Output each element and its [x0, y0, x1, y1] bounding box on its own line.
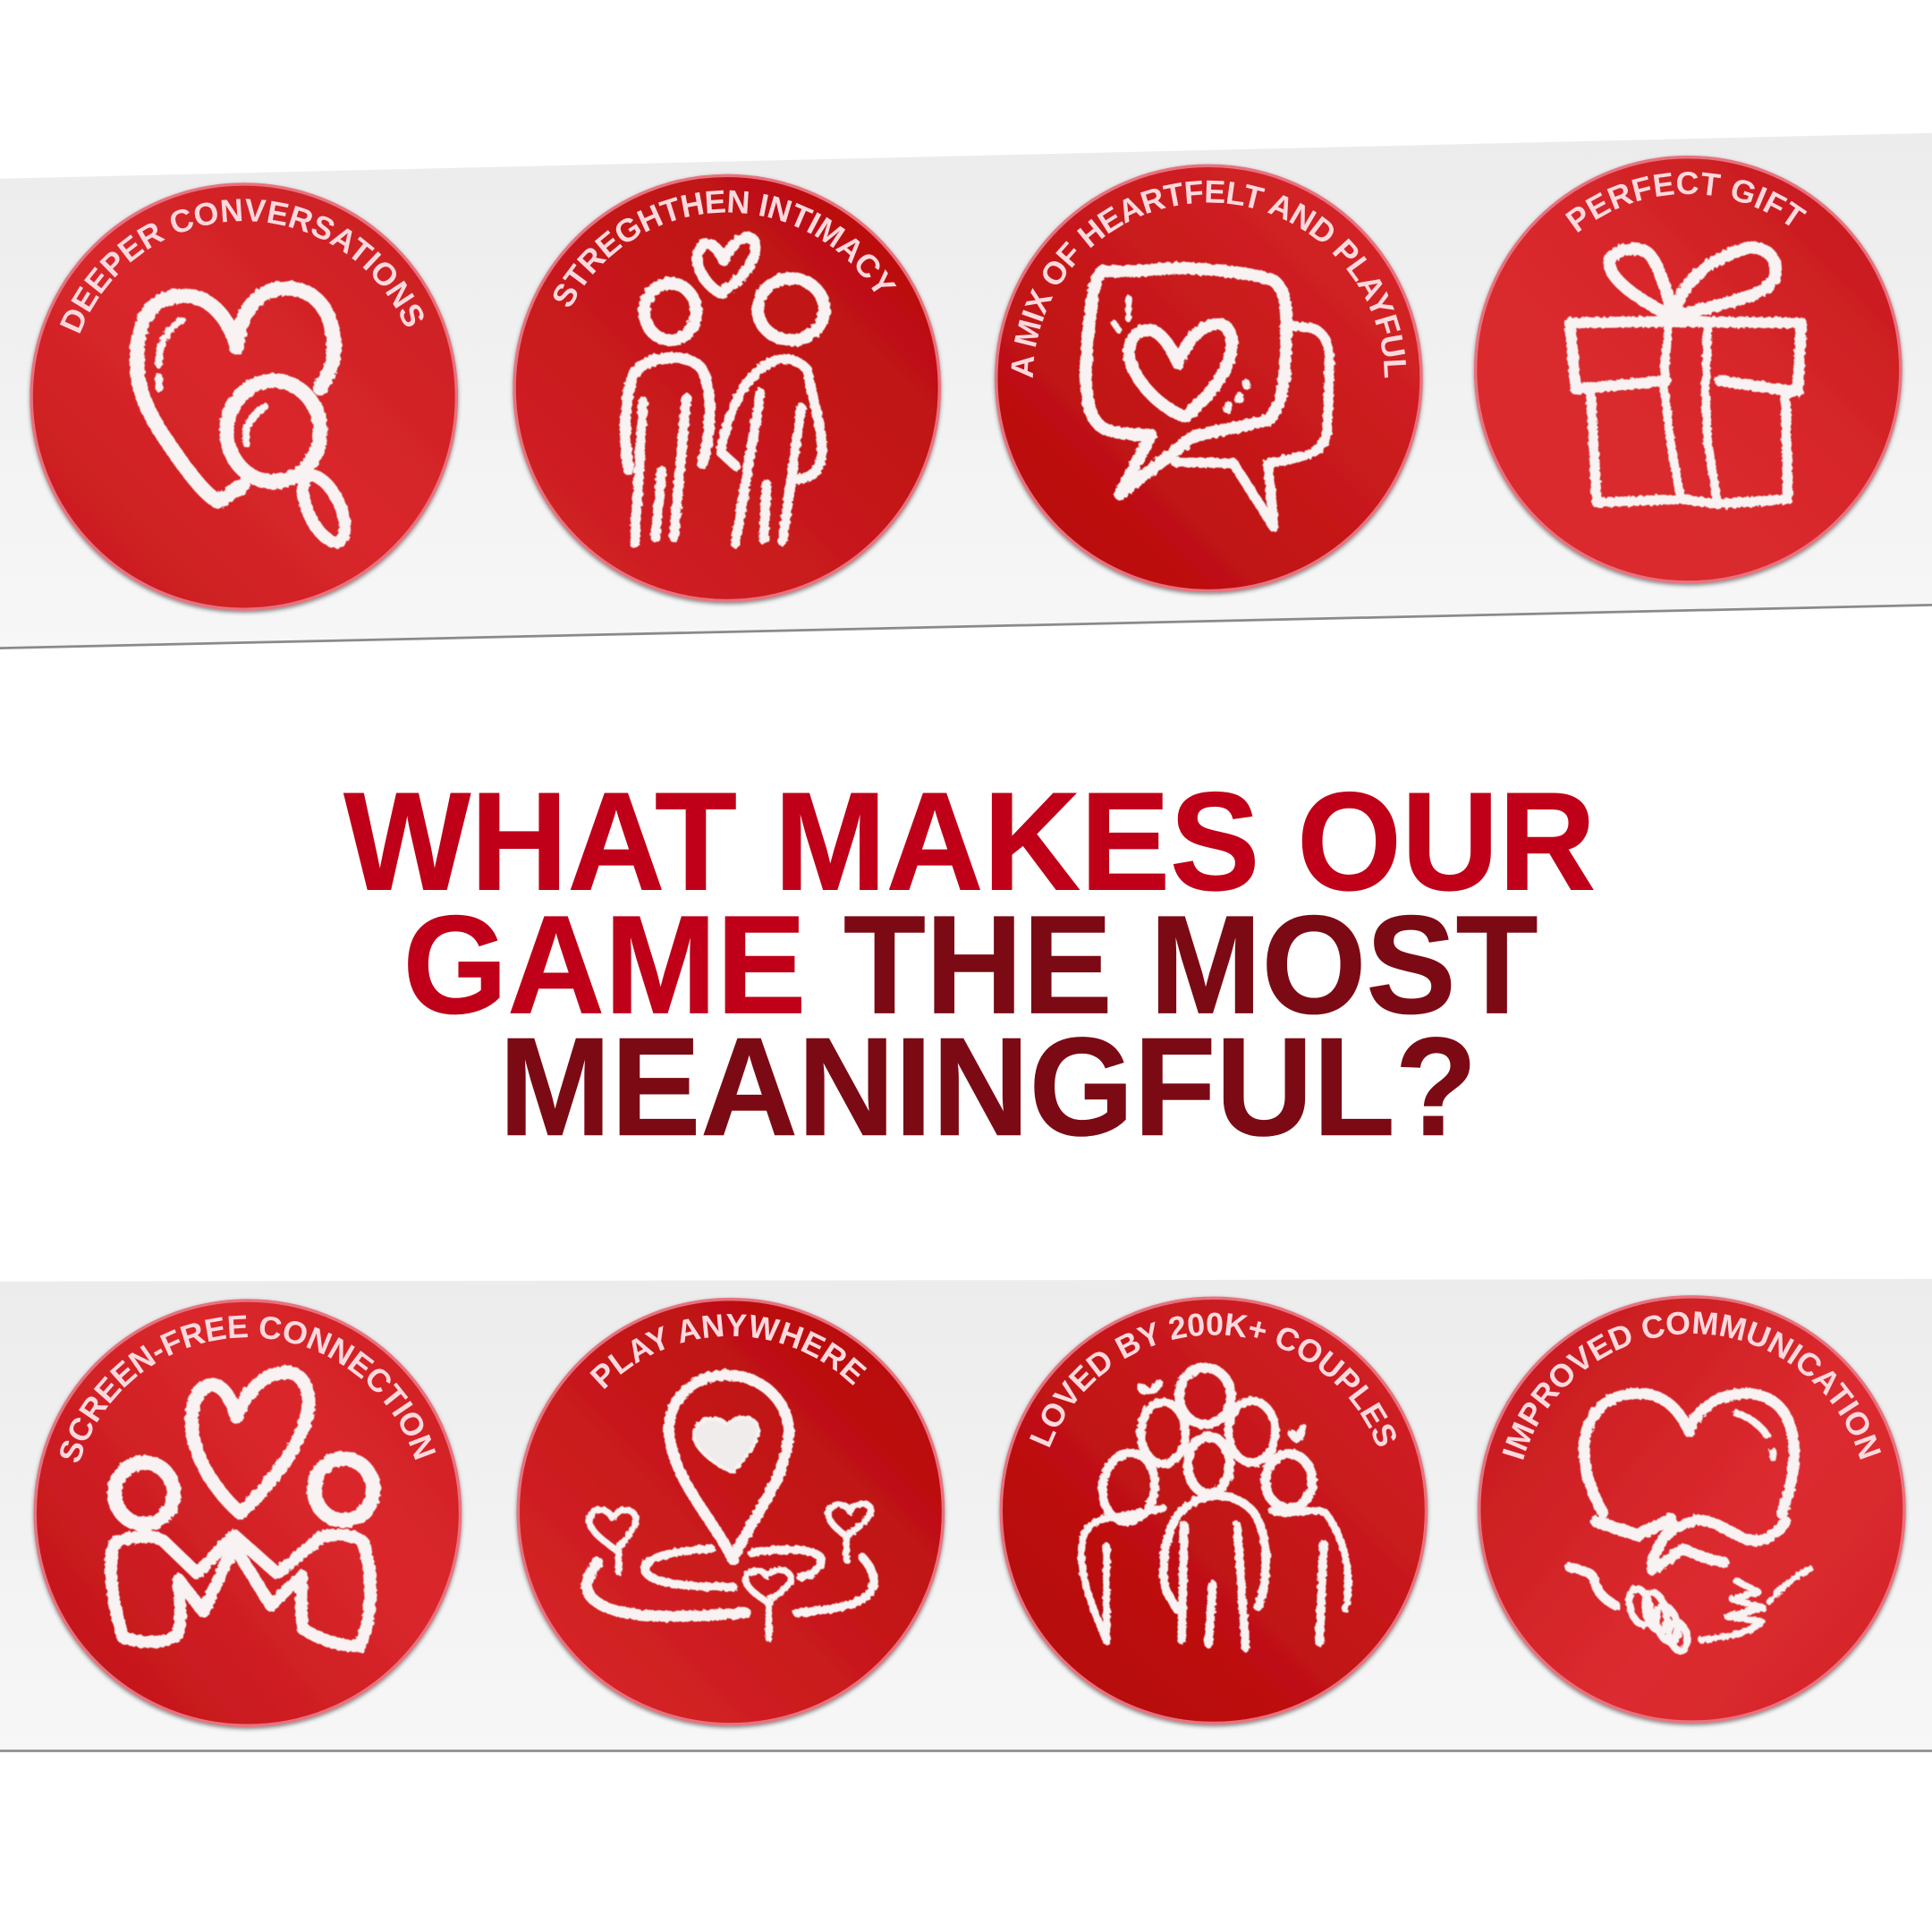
icon: heart above handshake — [1570, 1394, 1810, 1653]
panel: bottom band — [0, 1279, 1932, 1752]
icon: two people holding hands under heart — [111, 1372, 373, 1646]
icon: gift box — [1570, 248, 1801, 504]
title: WHAT MAKES OUR — [343, 764, 1596, 919]
title: GAME THE MOST — [402, 887, 1538, 1043]
icon: group of people — [1081, 1368, 1348, 1648]
badge: screen-free connection — [30, 1298, 465, 1732]
badge: play anywhere: PLAY ANYWHERE — [589, 1314, 868, 1389]
badge: loved by 200k+ couples — [996, 1295, 1431, 1730]
badge: mix of heartfelt and playful — [992, 163, 1426, 597]
badge: screen-free connection: SCREEN-FREE CONNECTION — [60, 1315, 436, 1462]
icon: map pin with hearts — [587, 1375, 874, 1639]
badge: loved by 200k+ couples: LOVED BY 200K+ COUPLES — [1030, 1313, 1396, 1447]
badge: deeper conversations — [27, 182, 462, 615]
badge: perfect gift: PERFECT GIFT — [1565, 172, 1807, 233]
badge: strengthen intimacy — [510, 174, 945, 606]
badge: perfect gift — [1470, 155, 1905, 589]
icon: heart with magnifier — [137, 288, 353, 548]
badge: strengthen intimacy: STREGHTHEN INTIMACY — [553, 190, 896, 307]
title: MEANINGFUL? — [499, 1009, 1477, 1165]
icon: couple with heart — [625, 237, 825, 544]
badge: improved communication: IMPROVED COMMUNICATION — [1503, 1311, 1881, 1460]
panel: top band — [0, 132, 1932, 649]
badge: improved communication — [1475, 1294, 1909, 1728]
badge: mix of heartfelt and playful: A MIX OF HEARTFELT AND PLAYFUL — [1011, 181, 1406, 377]
badge: deeper conversations: DEEPER CONVERSATIONS — [59, 199, 424, 334]
badge: play anywhere — [513, 1297, 948, 1731]
icon: speech bubbles with heart — [1086, 268, 1329, 528]
